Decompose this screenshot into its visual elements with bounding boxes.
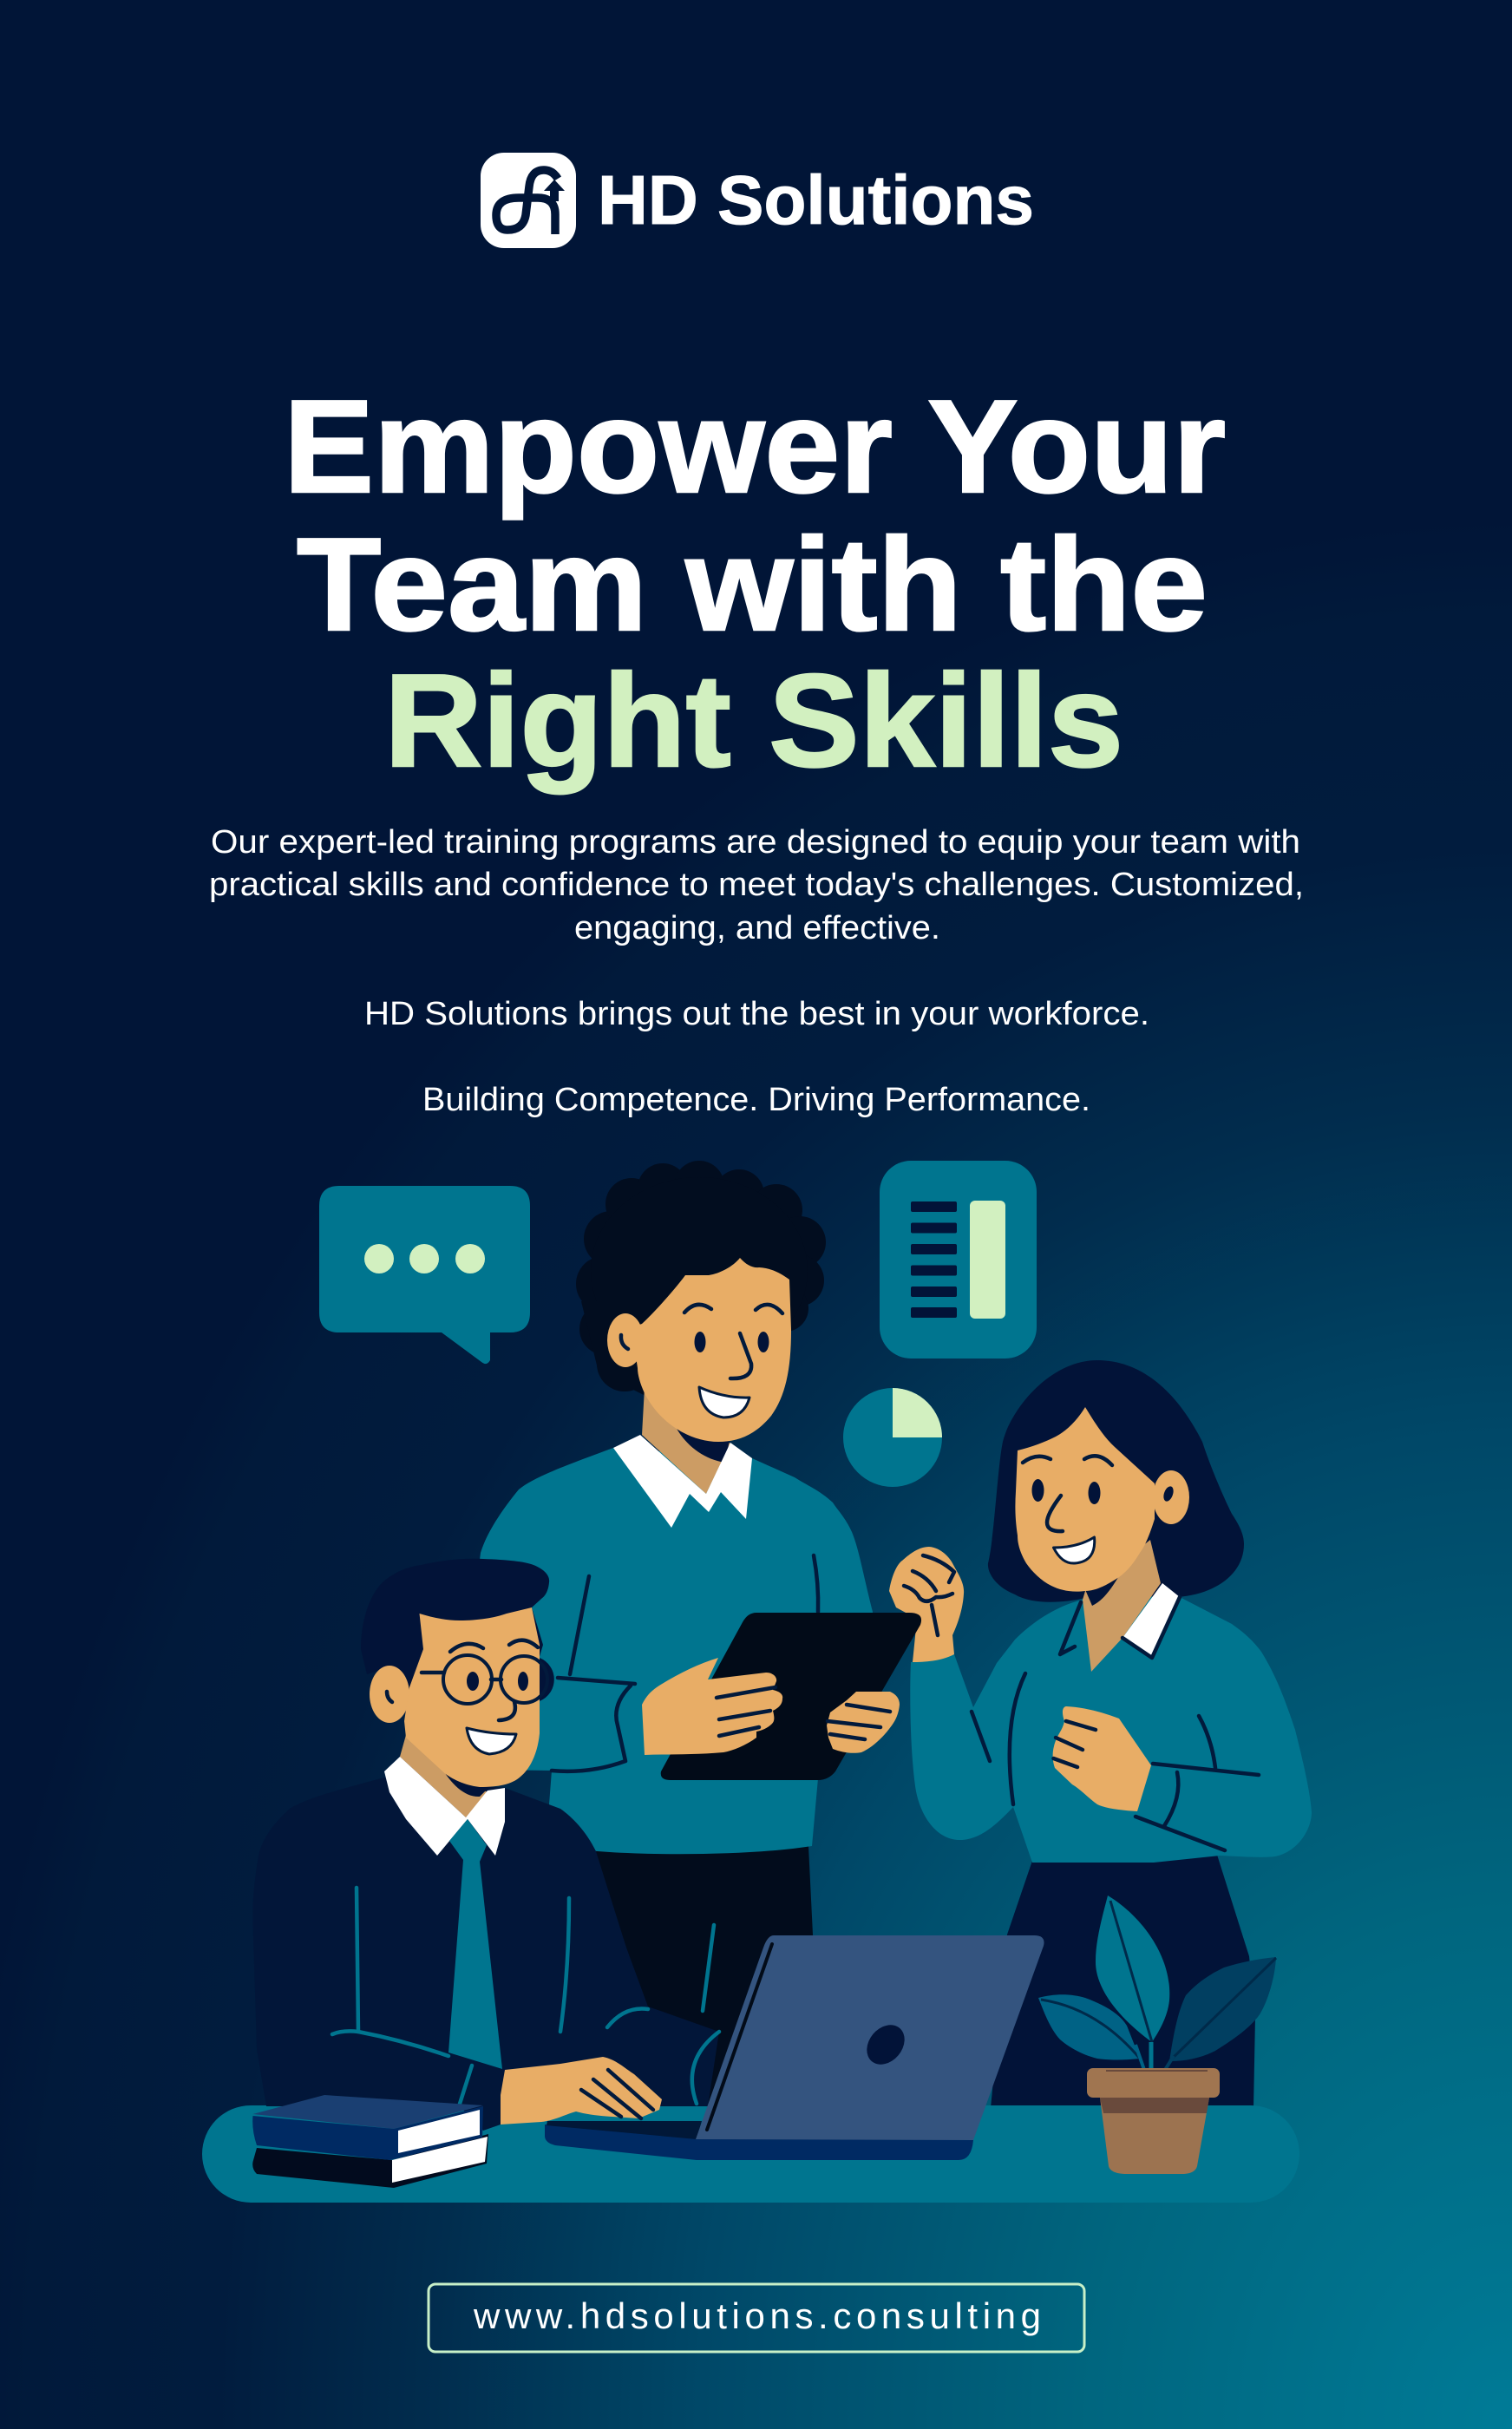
tablet [661,1613,921,1780]
woman collar [1123,1583,1180,1658]
brand name: HD Solutions [598,161,1034,239]
icon: speech bubble [319,1186,530,1364]
intro text block: engaging, and effective. [574,910,940,946]
standing man collar [613,1435,752,1528]
woman neck [1083,1540,1161,1672]
pot [1100,2098,1209,2174]
woman eyes and brows [1032,1479,1044,1502]
woman hair [988,1360,1244,1602]
woman raised fist [889,1547,964,1662]
seated man jacket folds [357,1888,358,2032]
books [252,2095,488,2188]
website URL box: www.hdsolutions.consulting [473,2295,1041,2336]
seated man ear [370,1666,409,1723]
laptop base [545,2125,973,2160]
standing man face [632,1258,791,1442]
title: Empower Your [284,373,1226,520]
intro text block: practical skills and confidence to meet today's challenges. Customized, [209,867,1304,903]
plant [1038,1895,1276,2174]
laptop lid [696,1935,1044,2140]
seated man collar [384,1757,505,1856]
person: standing man with tablet [468,1161,921,2108]
seated man hand [501,2057,662,2125]
standing man ear [607,1313,644,1367]
person: woman on the right [889,1360,1312,2108]
woman sweater [910,1596,1312,1863]
seated man glasses [422,1655,554,1704]
icon: HD Solutions logo mark [481,153,576,248]
seated man hair [361,1559,549,1692]
standing man left hand [642,1658,782,1755]
left leaf [1038,1994,1140,2059]
right leaf [1169,1957,1276,2061]
seated man tie [448,1819,502,2069]
woman chin shadow [1084,1575,1120,1606]
website URL box [429,2284,1084,2352]
standing man trousers [564,1846,820,2108]
logo: HD Solutions [481,153,1034,248]
seated man chin shadow [439,1763,491,1797]
standing man mouth [699,1387,749,1417]
laptop [545,1935,1044,2160]
woman ear [1153,1470,1189,1524]
standing man sweater [468,1448,873,1854]
intro text block: Our expert-led training programs are designed to equip your team with [211,824,1300,861]
standing man right hand [827,1692,900,1753]
seated man face [404,1607,540,1787]
seated man mouth [467,1728,516,1754]
standing man chin shadow [676,1427,730,1463]
intro text block: HD Solutions brings out the best in your workforce. [364,996,1149,1032]
standing man sweater folds and cuff [570,1576,589,1674]
woman hand on chest [1053,1706,1151,1811]
standing man eyes brows nose [694,1332,706,1352]
bottom book [252,2134,488,2188]
stems [1149,2042,1154,2070]
top book [253,2095,483,2129]
intro text block [209,824,1304,1118]
centre leaf [1096,1895,1169,2042]
desk [202,2105,1299,2203]
woman mouth [1053,1537,1095,1563]
standing man hair [576,1161,826,1395]
title: Right Skills [384,647,1123,795]
seated man eyes brows nose [467,1672,479,1691]
skirt [991,1855,1255,2108]
title [284,373,1226,795]
woman face [1015,1407,1155,1592]
seated man neck [400,1735,488,1817]
icon: pie chart [843,1388,942,1487]
icon: chart panel [880,1161,1037,1359]
standing man neck [642,1388,730,1494]
woman sweater folds [1060,1602,1081,1654]
intro text block: Building Competence. Driving Performance. [422,1082,1090,1118]
person: seated man with glasses [252,1559,719,2131]
seated man jacket [252,1778,719,2131]
title: Team with the [297,511,1208,658]
laptop logo [859,2018,913,2072]
